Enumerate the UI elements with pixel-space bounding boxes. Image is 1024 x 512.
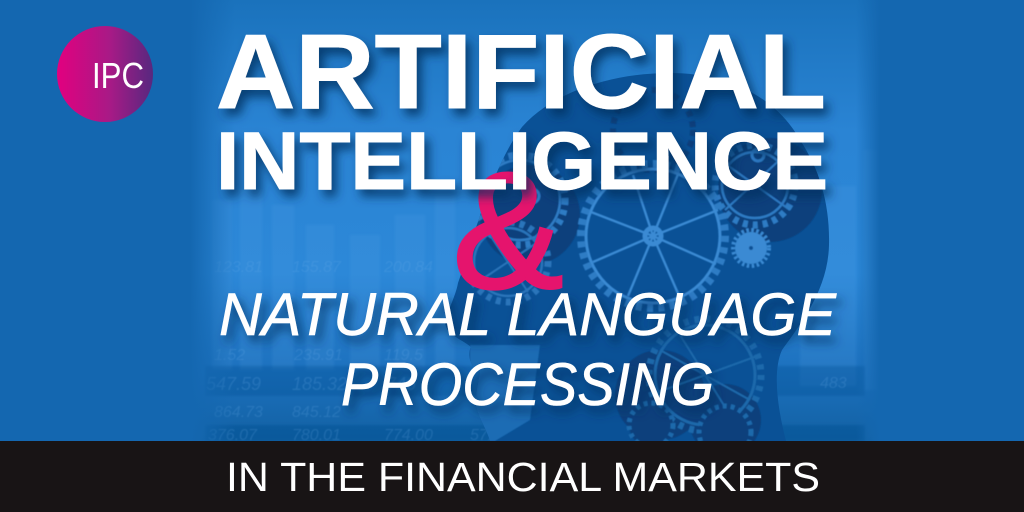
gear: upper centre dark teeth [613,90,693,170]
large spoked gear [581,164,725,308]
faint ticker numbers: 483 [820,375,847,392]
faint ticker numbers: 774.00 [384,427,433,444]
faint ticker numbers: 123.81 [214,259,263,276]
gear: lower left [468,222,548,302]
faint ticker numbers: 200.84 [383,259,433,276]
bottom banner: IN THE FINANCIAL MARKETS [226,454,820,500]
faint ticker numbers: 571.77 [470,427,520,444]
background photo panel [190,0,880,444]
faint ticker numbers: 1.52 [214,347,245,364]
ticker bands [205,366,865,441]
small solid gear [733,230,769,266]
faint ticker numbers: 119.5 [384,347,423,364]
dark gear field [480,138,822,456]
faint ticker numbers: 376.07 [208,427,258,444]
logo: IPC [57,26,153,122]
faint ticker numbers: 780.01 [292,427,341,444]
title: Natural Language Processing: NATURAL LANGUAGE [219,281,837,348]
faint ticker numbers: 185.32 [292,374,347,394]
gear: lower centre [649,319,761,431]
faint bar chart [212,150,878,390]
right edge fade [856,0,880,441]
faint ticker numbers: 235.91 [293,347,343,364]
faint ticker numbers: 864.73 [214,404,263,421]
left edge fade [190,0,235,441]
gear: upper right [715,145,795,225]
logo: IPC: IPC [92,55,144,96]
faint ticker numbers: 746 [386,374,417,394]
gear: bottom [626,400,754,441]
faint ticker numbers: 547.59 [206,374,261,394]
title: Artificial Intelligence [216,13,828,207]
bottom banner [0,441,1024,512]
title: Artificial Intelligence: INTELLIGENCE [216,116,828,207]
head silhouette with gears [445,73,829,458]
faint ticker numbers: 845.12 [292,404,341,421]
faint ticker numbers: 155.87 [292,259,342,276]
lighter jaw area [470,345,540,441]
gear: upper left [475,155,565,245]
title: Artificial Intelligence: ARTIFICIAL [216,13,826,131]
faint ticker numbers [206,259,847,444]
title: Natural Language Processing [219,281,837,418]
ampersand: & [452,138,564,324]
title: Natural Language Processing: PROCESSING [341,351,714,418]
